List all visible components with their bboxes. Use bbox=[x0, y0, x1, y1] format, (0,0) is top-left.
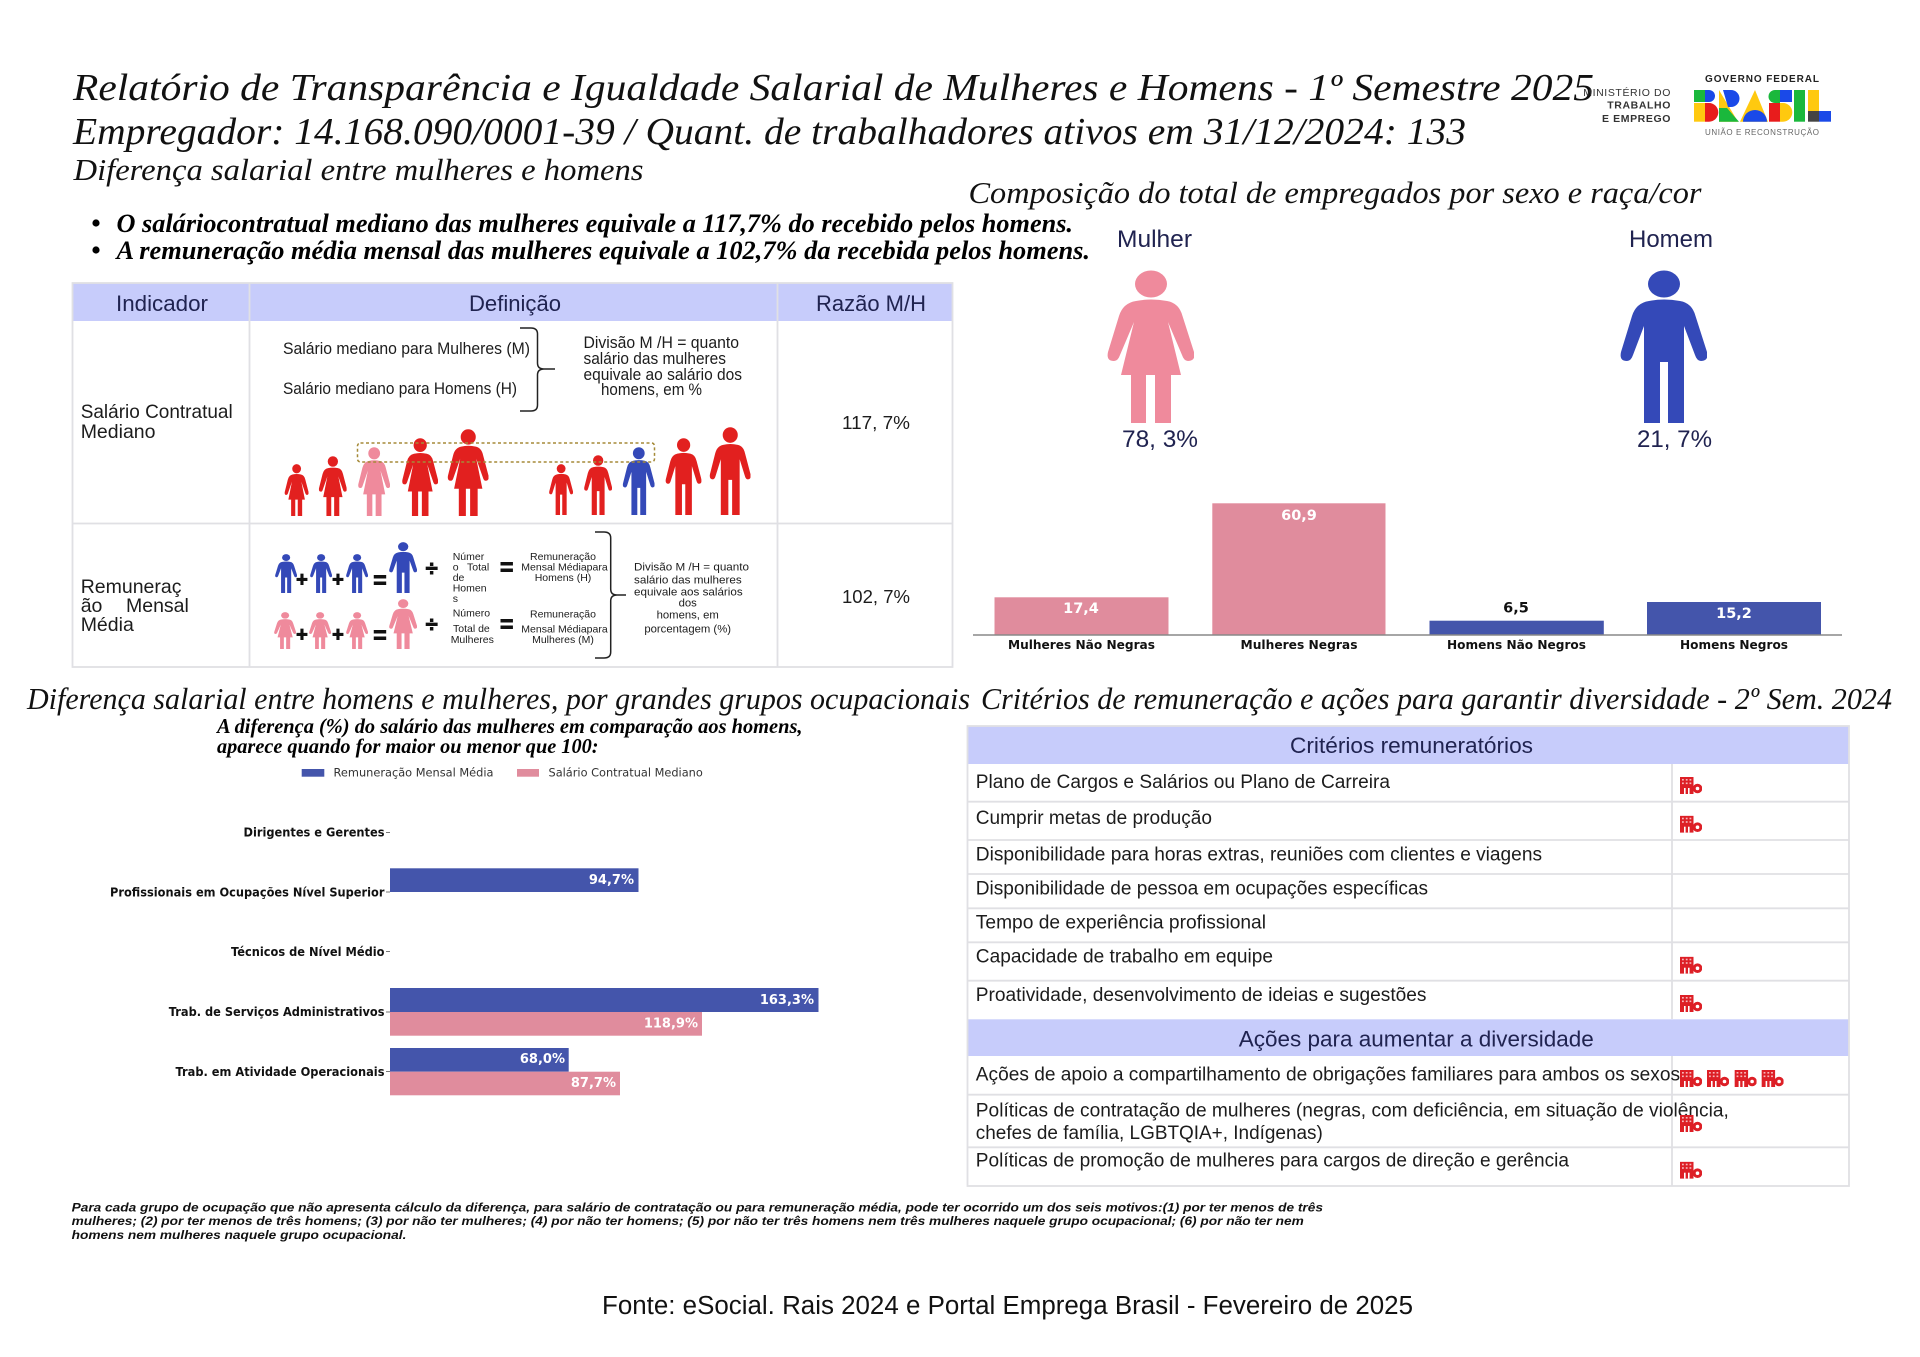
criteria rows: Tempo de experiência profissional bbox=[976, 913, 1266, 934]
brace and division text bbox=[595, 532, 749, 658]
equation text: s bbox=[453, 593, 458, 605]
category labels: Trab. em Atividade Operacionais bbox=[176, 1065, 384, 1079]
icons: company markers bbox=[1680, 777, 1782, 1179]
man share: Homem bbox=[1629, 226, 1713, 253]
bar chart: sexo e raça/cor bbox=[973, 503, 1842, 652]
row: salário contratual mediano: 117, 7% bbox=[842, 412, 910, 433]
key findings bullets: A remuneração média mensal das mulheres equivale a 102,7% da recebida pelos homens. bbox=[114, 236, 1090, 265]
equation text: Mensal Médiapara bbox=[521, 624, 608, 636]
heading: critérios: Critérios de remuneração e ações para garantir diversidade - 2º Sem. 2024 bbox=[981, 681, 1892, 716]
definition text: salário das mulheres bbox=[584, 350, 726, 368]
bar chart: sexo e raça/cor: 15,2 bbox=[1716, 606, 1752, 622]
bar values: 87,7% bbox=[571, 1076, 616, 1091]
bar chart: sexo e raça/cor: Homens Negros bbox=[1680, 637, 1788, 652]
row: salário contratual mediano: Salário Contratual bbox=[81, 401, 233, 423]
governo federal wordmark: GOVERNO FEDERAL bbox=[1705, 74, 1819, 85]
women equation icons: = bbox=[373, 622, 387, 648]
table header: Razão M/H bbox=[816, 291, 926, 316]
panel: indicator table bbox=[72, 283, 952, 667]
table header: Definição bbox=[469, 291, 561, 316]
bar values: 118,9% bbox=[644, 1017, 698, 1032]
logo: ministério e governo federal bbox=[1583, 74, 1831, 137]
woman share: Mulher bbox=[1117, 226, 1192, 253]
woman share bbox=[1108, 226, 1198, 453]
category labels: Técnicos de Nível Médio bbox=[231, 945, 384, 959]
governo federal wordmark bbox=[1694, 74, 1831, 137]
brace and division text: equivale aos salários bbox=[634, 586, 743, 598]
title: Empregador: 14.168.090/0001-39 / Quant. de trabalhadores ativos em 31/12/2024: 133 bbox=[72, 111, 1466, 153]
brace and division text: homens, em bbox=[657, 609, 719, 621]
chart subtitle: A diferença (%) do salário das mulheres em comparação aos homens, bbox=[215, 714, 802, 738]
criteria rows: Disponibilidade para horas extras, reuniões com clientes e viagens bbox=[976, 845, 1542, 866]
bar values: 94,7% bbox=[589, 873, 634, 888]
chart subtitle: aparece quando for maior ou menor que 100: bbox=[217, 734, 598, 758]
chart legend bbox=[302, 766, 703, 780]
heading: critérios remuneratórios: Critérios remuneratórios bbox=[1290, 733, 1533, 758]
bar chart: grupos ocupacionais bbox=[110, 826, 818, 1095]
definition text: homens, em % bbox=[601, 381, 702, 399]
equation text: Total de bbox=[453, 623, 490, 635]
criteria rows: Disponibilidade de pessoa em ocupações específicas bbox=[976, 878, 1428, 899]
equation text: Remuneração bbox=[530, 551, 596, 563]
category labels: Dirigentes e Gerentes bbox=[244, 826, 384, 840]
equation text: Remuneração bbox=[530, 609, 596, 621]
equation text: Mulheres (M) bbox=[532, 634, 594, 646]
row: salário contratual mediano: Mediano bbox=[81, 421, 156, 443]
bar values: 163,3% bbox=[760, 993, 814, 1008]
row: remuneração mensal média bbox=[81, 532, 910, 658]
bar chart: sexo e raça/cor: Mulheres Não Negras bbox=[1008, 637, 1155, 652]
table header: Indicador bbox=[116, 291, 208, 316]
heading: diferença salarial: Diferença salarial entre mulheres e homens bbox=[72, 152, 643, 187]
equation text: Total bbox=[467, 562, 489, 574]
ministry name bbox=[1583, 86, 1671, 125]
criteria rows: Capacidade de trabalho em equipe bbox=[976, 946, 1273, 967]
heading: grupos ocupacionais: Diferença salarial entre homens e mulheres, por grandes grupos ocupacionais bbox=[26, 681, 970, 716]
women equation icons bbox=[274, 599, 513, 649]
equation text: de bbox=[453, 572, 465, 584]
bar chart: sexo e raça/cor: 6,5 bbox=[1503, 601, 1529, 617]
women equation icons: + bbox=[296, 624, 308, 646]
key findings bullets bbox=[92, 209, 1090, 265]
panel: critérios table bbox=[968, 726, 1849, 1186]
definition text: Divisão M /H = quanto bbox=[584, 334, 739, 352]
chart legend: Remuneração Mensal Média bbox=[334, 766, 494, 780]
criteria rows: Cumprir metas de produção bbox=[976, 808, 1212, 829]
ministry name: E EMPREGO bbox=[1602, 113, 1671, 125]
row: remuneração mensal média: Média bbox=[81, 614, 134, 636]
chart legend: Salário Contratual Mediano bbox=[548, 766, 703, 780]
panel: composição por sexo bbox=[1108, 226, 1713, 453]
action rows: Políticas de promoção de mulheres para cargos de direção e gerência bbox=[976, 1151, 1569, 1172]
men equation icons: = bbox=[373, 567, 387, 593]
men equation icons bbox=[275, 542, 513, 593]
chart subtitle bbox=[215, 714, 802, 758]
row: remuneração mensal média: ão bbox=[81, 595, 103, 617]
brace and division text: salário das mulheres bbox=[634, 574, 742, 586]
bars bbox=[390, 868, 818, 1095]
equation text: Homen bbox=[453, 583, 487, 595]
governo federal wordmark: UNIÃO E RECONSTRUÇÃO bbox=[1705, 128, 1819, 137]
action rows: Ações de apoio a compartilhamento de obrigações familiares para ambos os sexos bbox=[976, 1065, 1680, 1086]
category labels bbox=[110, 826, 385, 1079]
ministry name: MINISTÉRIO DO bbox=[1583, 86, 1671, 99]
action rows: chefes de família, LGBTQIA+, Indígenas) bbox=[976, 1123, 1323, 1144]
key findings bullets: O saláriocontratual mediano das mulheres equivale a 117,7% do recebido pelos homens. bbox=[116, 209, 1073, 238]
women equation icons: ÷ bbox=[426, 612, 438, 637]
man share: 21, 7% bbox=[1637, 426, 1712, 453]
bar chart: sexo e raça/cor: 60,9 bbox=[1281, 508, 1317, 524]
equation text: Homens (H) bbox=[535, 572, 591, 584]
footnote bbox=[72, 1201, 1323, 1242]
definition text bbox=[283, 328, 742, 411]
definition text: Salário mediano para Mulheres (M) bbox=[283, 340, 530, 358]
ministry name: TRABALHO bbox=[1607, 100, 1671, 112]
median illustration: people bbox=[285, 427, 751, 516]
table header bbox=[72, 283, 952, 321]
equation text: Número bbox=[453, 608, 490, 620]
brace and division text: porcentagem (%) bbox=[644, 624, 731, 636]
equation text: Mulheres bbox=[451, 634, 494, 646]
footnote: mulheres; (2) por ter menos de três homens; (3) por não ter mulheres; (4) por não ter homens; (5) por não ter três homens nem três mulheres naquele grupo ocupacional; (6) por não ter nem bbox=[72, 1214, 1304, 1228]
row: remuneração mensal média: Mensal bbox=[126, 595, 189, 617]
men equation icons: + bbox=[296, 569, 308, 591]
bar chart: sexo e raça/cor: Homens Não Negros bbox=[1447, 637, 1586, 652]
category labels: Profissionais em Ocupações Nível Superior bbox=[110, 886, 385, 900]
men equation icons: ÷ bbox=[426, 556, 438, 581]
footnote: Para cada grupo de ocupação que não apresenta cálculo da diferença, para salário de contratação ou para remuneração média, pode ter ocorrido um dos seis motivos:(1) por ter menos de três bbox=[72, 1201, 1323, 1215]
women equation icons: + bbox=[332, 624, 344, 646]
action rows bbox=[976, 1065, 1729, 1172]
man share bbox=[1621, 226, 1713, 453]
brace and division text: Divisão M /H = quanto bbox=[634, 562, 749, 574]
bar values: 68,0% bbox=[520, 1052, 565, 1067]
title: Relatório de Transparência e Igualdade Salarial de Mulheres e Homens - 1º Semestre 2025 bbox=[72, 67, 1594, 109]
action rows: Políticas de contratação de mulheres (negras, com deficiência, em situação de violência, bbox=[976, 1101, 1729, 1122]
women equation icons: = bbox=[500, 611, 513, 637]
criteria rows bbox=[976, 772, 1542, 1006]
source line: Fonte: eSocial. Rais 2024 e Portal Emprega Brasil - Fevereiro de 2025 bbox=[602, 1292, 1413, 1320]
heading: composição: Composição do total de empregados por sexo e raça/cor bbox=[968, 175, 1702, 210]
row: salário contratual mediano bbox=[81, 328, 910, 516]
heading: ações: Ações para aumentar a diversidade bbox=[1239, 1027, 1594, 1052]
bar chart: sexo e raça/cor: Mulheres Negras bbox=[1240, 637, 1358, 652]
equation text: o bbox=[453, 562, 459, 574]
equation text bbox=[451, 551, 608, 646]
criteria rows: Proatividade, desenvolvimento de ideias e sugestões bbox=[976, 985, 1426, 1006]
men equation icons: = bbox=[500, 554, 513, 580]
row: remuneração mensal média: 102, 7% bbox=[842, 586, 910, 607]
category labels: Trab. de Serviços Administrativos bbox=[169, 1005, 384, 1019]
equation text: Mensal Médiapara bbox=[521, 562, 608, 574]
title bbox=[72, 67, 1594, 153]
definition text: Salário mediano para Homens (H) bbox=[283, 380, 517, 398]
footnote: homens nem mulheres naquele grupo ocupacional. bbox=[72, 1228, 406, 1242]
men equation icons: + bbox=[332, 569, 344, 591]
bar values bbox=[520, 873, 814, 1091]
woman share: 78, 3% bbox=[1122, 426, 1198, 453]
criteria rows: Plano de Cargos e Salários ou Plano de Carreira bbox=[976, 772, 1390, 793]
equation text: Númer bbox=[453, 551, 485, 563]
bar chart: sexo e raça/cor: 17,4 bbox=[1063, 601, 1099, 617]
definition text: equivale ao salário dos bbox=[584, 366, 742, 384]
brace and division text: dos bbox=[679, 598, 697, 610]
row: remuneração mensal média: Remuneraç bbox=[81, 576, 182, 598]
